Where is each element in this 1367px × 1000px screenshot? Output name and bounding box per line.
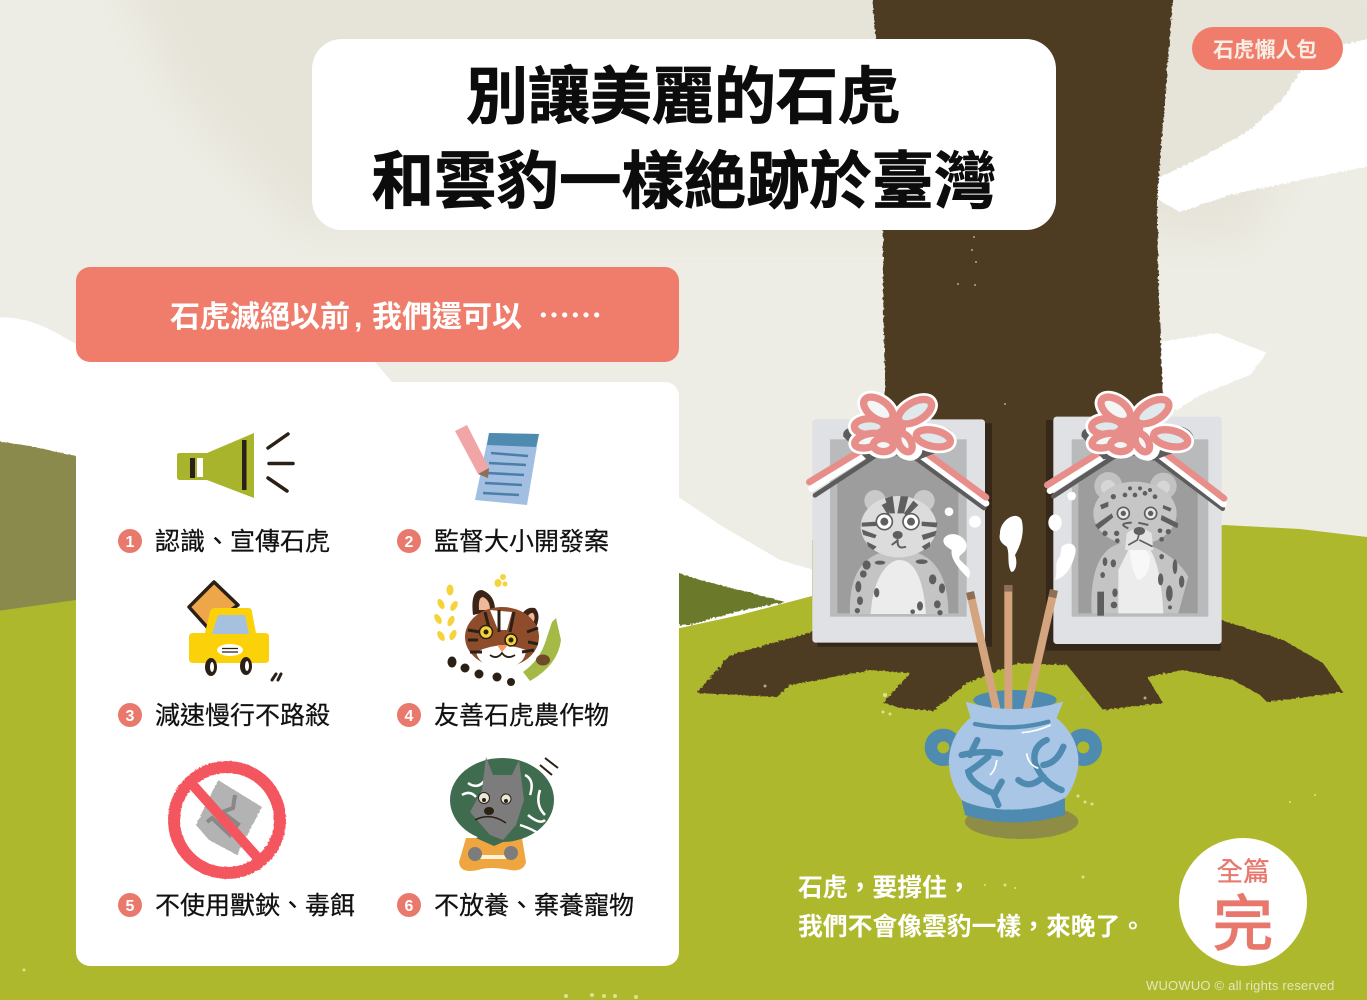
white cloud mid right xyxy=(1155,333,1267,410)
title second line: 和雲豹一樣絶跡於臺灣 xyxy=(372,147,996,217)
icon: yellow car and road sign xyxy=(189,582,281,680)
copyright: WUOWUO © all rights reserved xyxy=(1146,978,1335,993)
label 5: 不使用獸鋏、毒餌 xyxy=(155,892,355,920)
banner heading: 石虎滅絕以前 xyxy=(170,301,350,334)
ground speckles xyxy=(22,693,1316,999)
closing message: 我們不會像雲豹一樣，來晚了。 xyxy=(798,913,1145,941)
olive far hill xyxy=(0,440,120,620)
title card xyxy=(312,39,1056,230)
leopard portrait xyxy=(1091,472,1188,616)
white cloud left ridge xyxy=(0,317,830,640)
cat portrait xyxy=(850,490,948,615)
memorial frame left: leopard cat xyxy=(809,392,992,647)
memorial frame right: clouded leopard xyxy=(1046,392,1224,651)
label 1: 1 xyxy=(126,534,135,551)
rice grains xyxy=(433,574,508,642)
end badge xyxy=(1179,838,1307,966)
green ground xyxy=(0,530,1367,1000)
end badge: 完 xyxy=(1213,891,1273,958)
white cloud upper right xyxy=(1150,38,1367,212)
title text: 別讓美麗的石虎 xyxy=(466,63,900,132)
incense sticks xyxy=(970,585,1054,710)
trunk speckles xyxy=(764,236,1146,700)
vase handles xyxy=(931,735,1096,760)
label 4: 友善石虎農作物 xyxy=(434,702,609,730)
end badge: 全篇 xyxy=(1216,857,1270,887)
tree trunk and roots xyxy=(697,0,1343,711)
cat head xyxy=(472,590,495,615)
label 1: 認識、宣傳石虎 xyxy=(155,528,330,556)
tag: series name xyxy=(1192,27,1343,70)
banner heading: 我們還可以 xyxy=(372,301,522,334)
label 2: 2 xyxy=(405,534,414,551)
dark green bush xyxy=(676,572,785,625)
label 4: 4 xyxy=(405,708,414,725)
banner heading: , xyxy=(354,301,362,334)
icon: leopard cat with crops xyxy=(433,574,561,686)
label 2: 監督大小開發案 xyxy=(434,528,609,556)
incense vase with three sticks xyxy=(931,585,1096,839)
banner heading: …… xyxy=(538,291,602,337)
label 5: 5 xyxy=(126,898,135,915)
paw-print beans xyxy=(448,656,515,686)
incense smoke xyxy=(943,492,1076,580)
tag: series name: 石虎懶人包 xyxy=(1213,39,1317,62)
label 6: 不放養、棄養寵物 xyxy=(434,892,634,920)
roof ribbon xyxy=(1047,430,1224,509)
panel: six actions xyxy=(76,382,679,966)
icon: sad dog in turtle shell xyxy=(450,757,558,871)
roof ribbon xyxy=(809,430,986,508)
label 3: 3 xyxy=(126,708,135,725)
icon: megaphone xyxy=(177,433,293,498)
label 3: 減速慢行不路殺 xyxy=(155,702,330,730)
icon: notepad and pencil xyxy=(455,425,539,505)
label 6: 6 xyxy=(405,898,414,915)
vase pattern xyxy=(962,722,1063,805)
closing message: 石虎，要撐住， xyxy=(798,874,972,902)
icon: prohibited trap and poison bait xyxy=(174,767,280,873)
banner heading xyxy=(76,267,679,362)
right green hill top xyxy=(1050,525,1367,600)
closing message xyxy=(798,874,1145,941)
plant and beetle xyxy=(523,618,561,681)
